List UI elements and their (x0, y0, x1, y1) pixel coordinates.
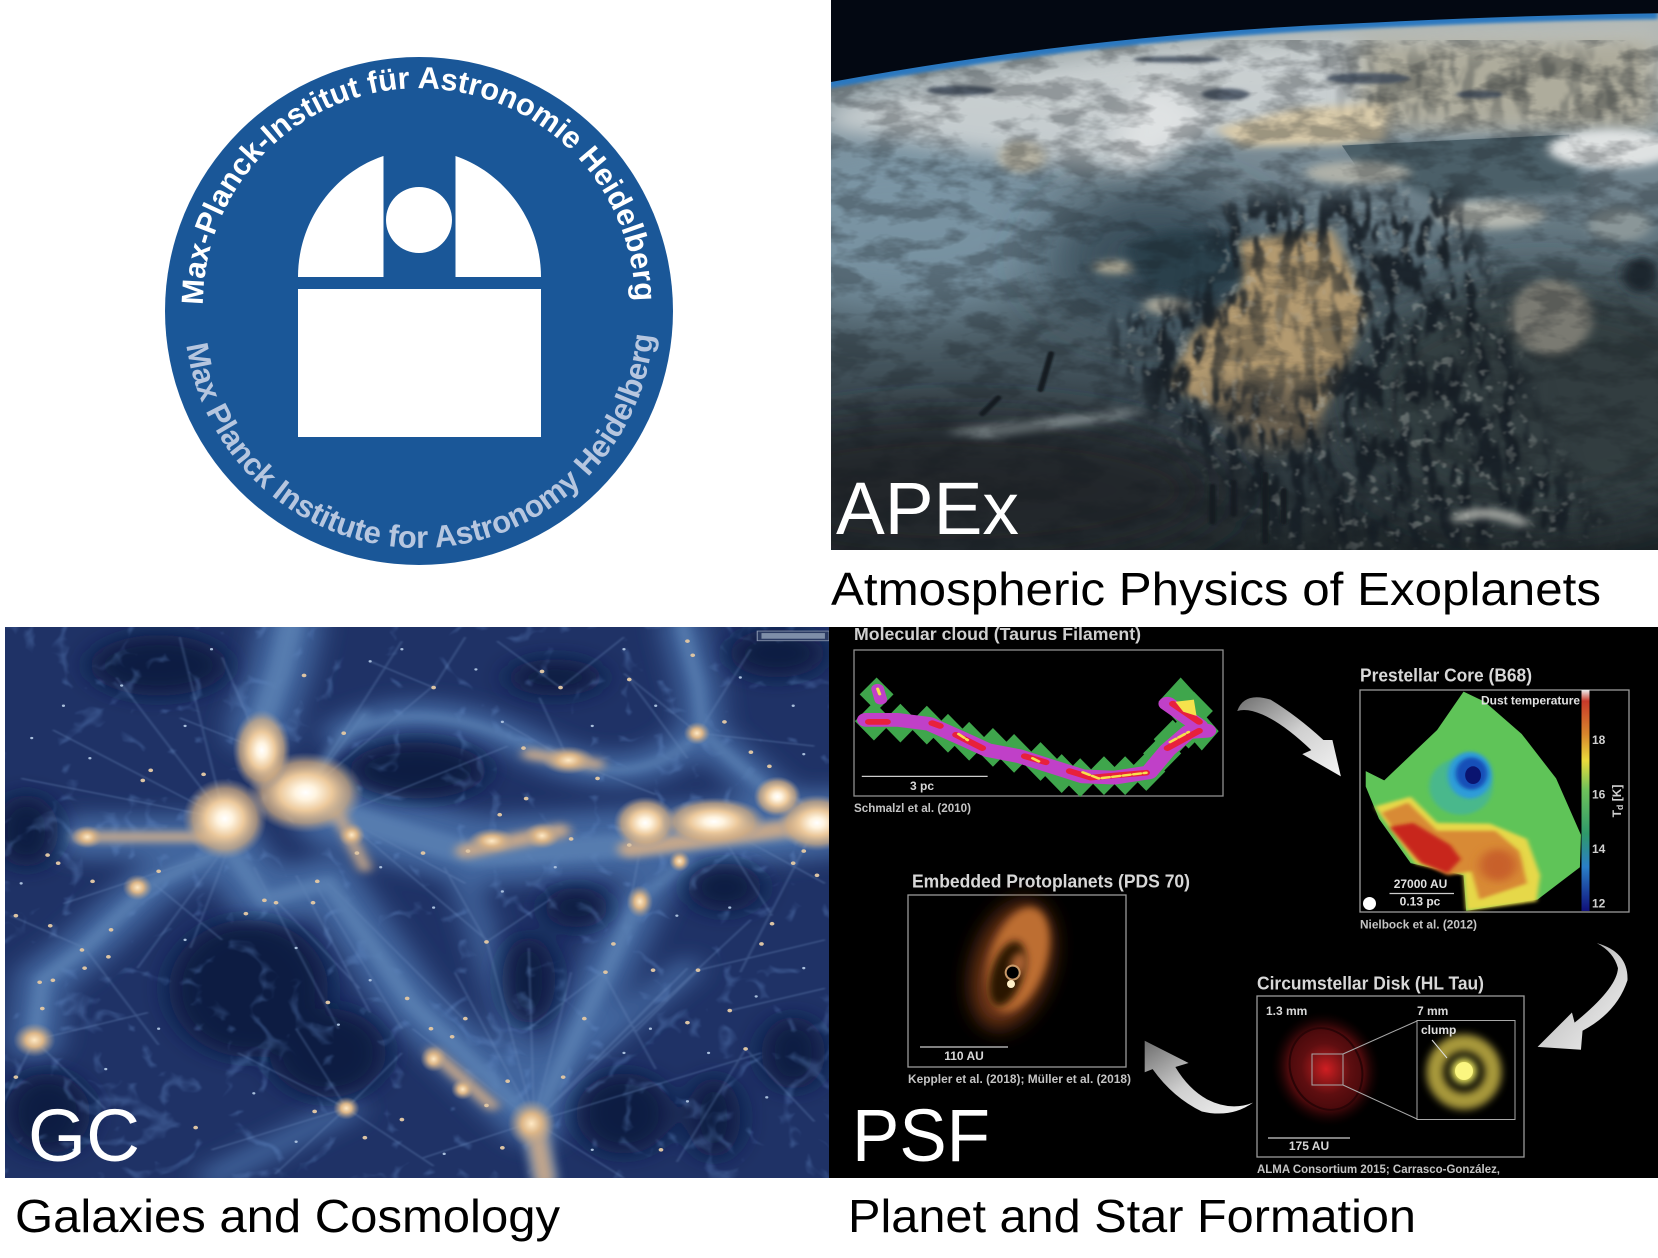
axis label: dust temperature units: [K] (1610, 785, 1624, 805)
thin radiating filaments (0, 637, 825, 1178)
scale: 110 AU (920, 1047, 1008, 1063)
distant cloud clusters (1318, 43, 1658, 128)
axis label: dust temperature units: T (1610, 810, 1624, 817)
labels: wavelengths and clump: 7 mm (1417, 1004, 1448, 1018)
axis label: dust temperature units: d (1615, 805, 1625, 810)
white clouds (945, 129, 1658, 438)
colour scale legend (757, 631, 829, 641)
citation: ALMA: ALMA Consortium 2015; Carrasco-González, (1257, 1162, 1500, 1176)
tiny pale stars (21, 649, 804, 1154)
scale block: 27000 AU (1394, 877, 1447, 891)
scale label: 3 pc: 3 pc (910, 779, 934, 793)
scale block: 0.13 pc (1400, 894, 1441, 908)
sub-panel: embedded protoplanets PDS 70 (908, 871, 1190, 1086)
shadowed ocean (1125, 229, 1241, 301)
sub-panel: circumstellar disk HL Tau (1253, 974, 1524, 1176)
label: PSF: PSF (852, 1094, 990, 1177)
colour bar ticks: 12 (1592, 897, 1606, 911)
colour bar ticks (1592, 733, 1606, 911)
labels: wavelengths and clump: 1.3 mm (1266, 1004, 1307, 1018)
dark ocean band (1342, 135, 1585, 201)
heading: prestellar core: Prestellar Core (B68) (1360, 666, 1532, 686)
panel: GC cosmic web simulation (0, 625, 857, 1178)
logo: Max Planck Institute for Astronomy (165, 57, 673, 565)
small galaxies (16, 641, 817, 1150)
colour bar (1582, 690, 1590, 911)
colour bar ticks: 18 (1592, 733, 1606, 747)
scale: 110 AU: 110 AU (944, 1049, 984, 1063)
fine filament texture (0, 625, 829, 1178)
lower gold haze (1199, 382, 1321, 450)
warm glowing filament (79, 754, 829, 1178)
golden sun reflection (1167, 229, 1368, 438)
scale block (1363, 872, 1462, 911)
icon: observatory dome (298, 156, 541, 437)
icon: bright protoplanet (1007, 980, 1015, 988)
arrow: core to disk (1538, 943, 1628, 1050)
image: red disk at 1.3 mm (1253, 994, 1399, 1144)
sub-panel: molecular cloud Taurus filament (854, 624, 1223, 815)
heading: molecular cloud: Molecular cloud (Taurus Filament) (854, 624, 1141, 644)
panel: PSF star formation diagram (829, 624, 1658, 1178)
sun glint on upper ocean (1215, 102, 1390, 147)
heading: embedded protoplanets: Embedded Protoplanets (PDS 70) (912, 871, 1190, 891)
tall shadow streaks (982, 354, 1284, 542)
dark cloud dashes near horizon (927, 56, 1503, 100)
panel: APEx earth photograph (831, 0, 1658, 550)
broad blue halos (34, 625, 829, 1178)
blue filaments (34, 625, 829, 1178)
labels: wavelengths and clump (1266, 1004, 1456, 1058)
heading: circumstellar disk: Circumstellar Disk (HL Tau) (1257, 974, 1484, 994)
labels: wavelengths and clump: clump (1421, 1023, 1456, 1037)
image: yellow ring at 7 mm (1435, 1043, 1493, 1101)
caption: Planet and Star Formation: Planet and Star Formation (848, 1190, 1416, 1242)
label: dust temperature: Dust temperature (1481, 694, 1580, 708)
zoom connector (1312, 1020, 1515, 1120)
image: PDS 70 disk (955, 890, 1069, 1040)
arrow: cloud to core (1237, 697, 1341, 776)
cloud texture (829, 40, 1658, 550)
bright cloud tops (1112, 186, 1602, 550)
dark cloud shadows (1107, 181, 1588, 543)
chart: dust temperature map (1366, 692, 1581, 911)
scale: 175 AU (1268, 1138, 1350, 1153)
arrow: disk to protoplanets (1145, 1041, 1253, 1114)
logo text: English name: Max Planck Institute for Astronomy Heidelberg (186, 334, 659, 548)
scale: 175 AU: 175 AU (1289, 1139, 1329, 1153)
citation: Keppler and Müller: Keppler et al. (2018); Müller et al. (2018) (908, 1072, 1131, 1086)
bright galaxy clusters (13, 710, 857, 1148)
label: APEx: APEx (836, 467, 1019, 550)
bright lower cloud (1458, 513, 1522, 522)
colour bar ticks: 16 (1592, 788, 1606, 802)
citation: Schmalzl: Schmalzl et al. (2010) (854, 801, 971, 815)
label: GC: GC (28, 1094, 140, 1177)
colour bar ticks: 14 (1592, 842, 1606, 856)
logo text: German name: Max-Planck-Institut für Astronomie Heidelberg (182, 67, 652, 304)
dark cosmic voids (0, 629, 825, 1158)
caption: Atmospheric Physics of Exoplanets: Atmospheric Physics of Exoplanets (831, 563, 1601, 615)
citation: Nielbock: Nielbock et al. (2012) (1360, 918, 1477, 932)
chart: filament map (855, 677, 1219, 797)
earth shading (831, 13, 1658, 524)
sub-panel: prestellar core B68 (1360, 666, 1629, 932)
caption: Galaxies and Cosmology: Galaxies and Cosmology (15, 1190, 560, 1242)
black space and atmosphere rim (829, 0, 1658, 88)
